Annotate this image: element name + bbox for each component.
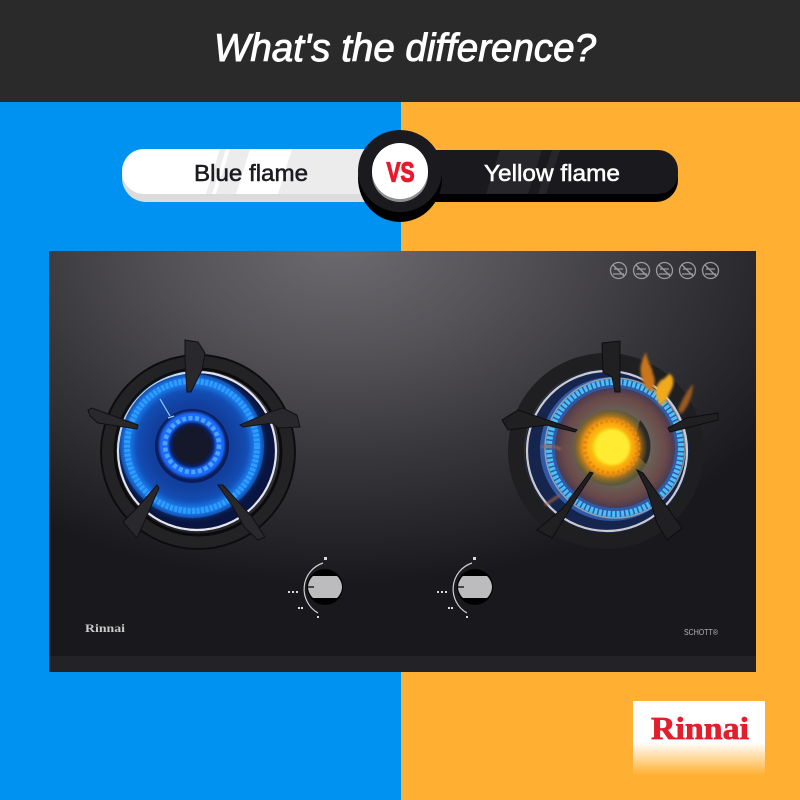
label: yellow flame pill: Yellow flame [484, 160, 620, 186]
logo: Rinnai: Rinnai [651, 710, 749, 746]
title: What's the difference? [214, 27, 597, 70]
label: yellow flame pill [410, 150, 678, 202]
blue flame ring [549, 382, 681, 514]
VS badge [358, 130, 442, 222]
logo: Rinnai [633, 701, 765, 775]
SCHOTT mark: SCHOTT® [684, 628, 718, 637]
header bar [0, 0, 800, 102]
central hub [155, 409, 229, 483]
left burner: blue flame [88, 340, 300, 549]
inner blue flame [164, 417, 220, 473]
control knob 2 [437, 557, 493, 618]
blue flame ring [127, 381, 257, 511]
cooktop brand text: Rinnai [85, 621, 126, 635]
central hub [574, 410, 650, 486]
background: orange half [401, 102, 800, 800]
yellow flame core [573, 410, 647, 484]
label: blue flame pill [122, 149, 392, 202]
escaping flame [640, 352, 693, 414]
control knob 1 [288, 557, 343, 618]
warning icons row [610, 262, 718, 278]
right burner: yellow flame [502, 341, 718, 541]
pot support arms [502, 341, 718, 540]
pot support arms [88, 340, 300, 540]
label: blue flame pill: Blue flame [194, 160, 308, 186]
background: blue half [0, 102, 401, 800]
cooktop panel [49, 251, 756, 672]
VS badge: VS [386, 156, 414, 188]
